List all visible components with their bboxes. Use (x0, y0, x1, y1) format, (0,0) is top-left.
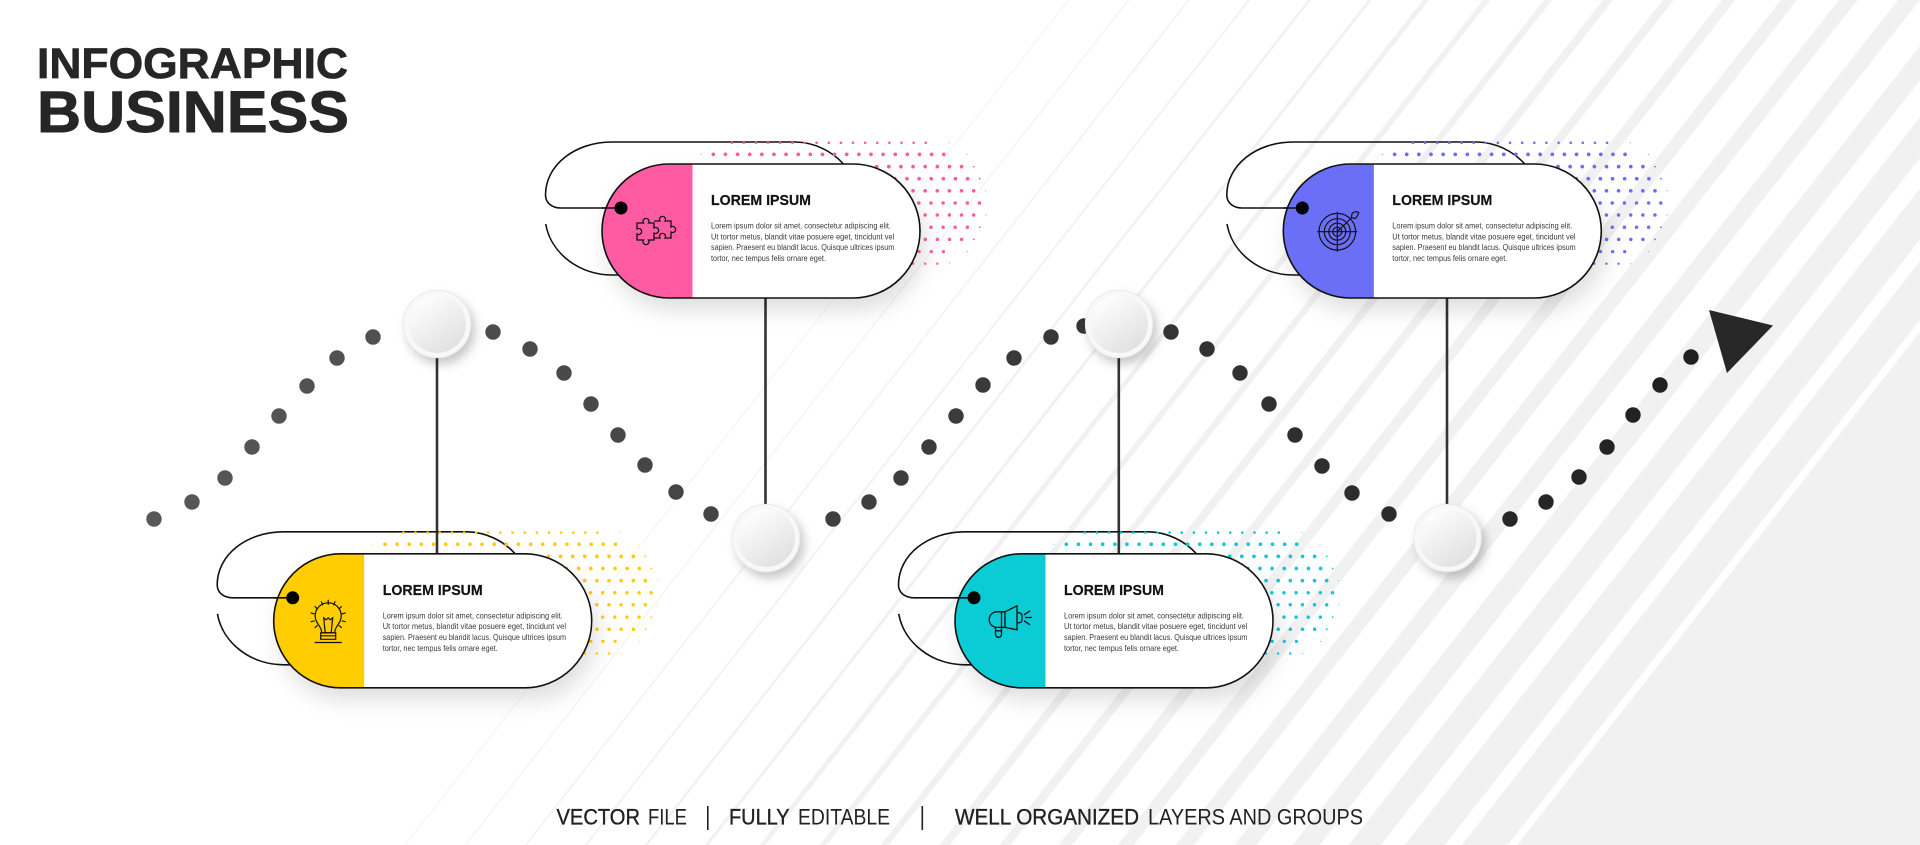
body text: sapien. Praesent eu blandit lacus. Quisque ultrices ipsum (1064, 632, 1247, 642)
body text: tortor, nec tempus felis ornare eget. (383, 643, 498, 653)
body text: Ut tortor metus, blandit vitae posuere eget, tincidunt vel (711, 231, 894, 241)
body text: Lorem ipsum dolor sit amet, consectetur adipiscing elit. (1064, 610, 1244, 620)
body text: sapien. Praesent eu blandit lacus. Quisque ultrices ipsum (383, 632, 566, 642)
body text (1064, 610, 1247, 653)
panel: purple card (1227, 142, 1667, 298)
node 2 (732, 504, 800, 572)
body text (711, 220, 894, 263)
node 3 (1085, 290, 1153, 358)
arrow head (1709, 310, 1773, 373)
heading: LOREM IPSUM (1064, 582, 1164, 599)
node 1 (403, 290, 471, 358)
connector lines (437, 296, 1447, 556)
panel: yellow card (217, 532, 658, 688)
title: BUSINESS (37, 80, 349, 145)
body text: Ut tortor metus, blandit vitae posuere eget, tincidunt vel (1392, 231, 1576, 241)
panel: pink card (546, 142, 986, 298)
footer text: EDITABLE (798, 804, 890, 829)
body text: tortor, nec tempus felis ornare eget. (711, 253, 826, 263)
body text: sapien. Praesent eu blandit lacus. Quisque ultrices ipsum (711, 242, 894, 252)
panel: cyan card (898, 532, 1339, 688)
footer text (556, 804, 1363, 830)
body text (383, 610, 566, 653)
body text: Ut tortor metus, blandit vitae posuere eget, tincidunt vel (383, 621, 566, 631)
footer text: FULLY (729, 804, 790, 829)
icon: light bulb (311, 600, 346, 642)
body text (1392, 220, 1576, 263)
dotted path (146, 318, 1699, 527)
body text: Ut tortor metus, blandit vitae posuere eget, tincidunt vel (1064, 621, 1247, 631)
icon: target (1317, 212, 1359, 252)
body text: tortor, nec tempus felis ornare eget. (1064, 643, 1179, 653)
footer text: WELL ORGANIZED (955, 804, 1139, 829)
heading: LOREM IPSUM (1392, 192, 1492, 209)
body text: tortor, nec tempus felis ornare eget. (1392, 253, 1507, 263)
body text: Lorem ipsum dolor sit amet, consectetur adipiscing elit. (1392, 220, 1572, 230)
footer text: FILE (648, 804, 687, 829)
footer text: LAYERS AND GROUPS (1148, 804, 1363, 829)
body text: sapien. Praesent eu blandit lacus. Quisque ultrices ipsum (1392, 242, 1576, 252)
body text: Lorem ipsum dolor sit amet, consectetur adipiscing elit. (711, 220, 891, 230)
title: INFOGRAPHIC (37, 40, 348, 88)
icon: megaphone (989, 606, 1032, 637)
heading: LOREM IPSUM (383, 582, 483, 599)
footer text: VECTOR (556, 804, 640, 829)
title (37, 40, 349, 145)
heading: LOREM IPSUM (711, 192, 811, 209)
icon: puzzle (637, 216, 676, 245)
body text: Lorem ipsum dolor sit amet, consectetur adipiscing elit. (383, 610, 563, 620)
node 4 (1414, 504, 1481, 572)
